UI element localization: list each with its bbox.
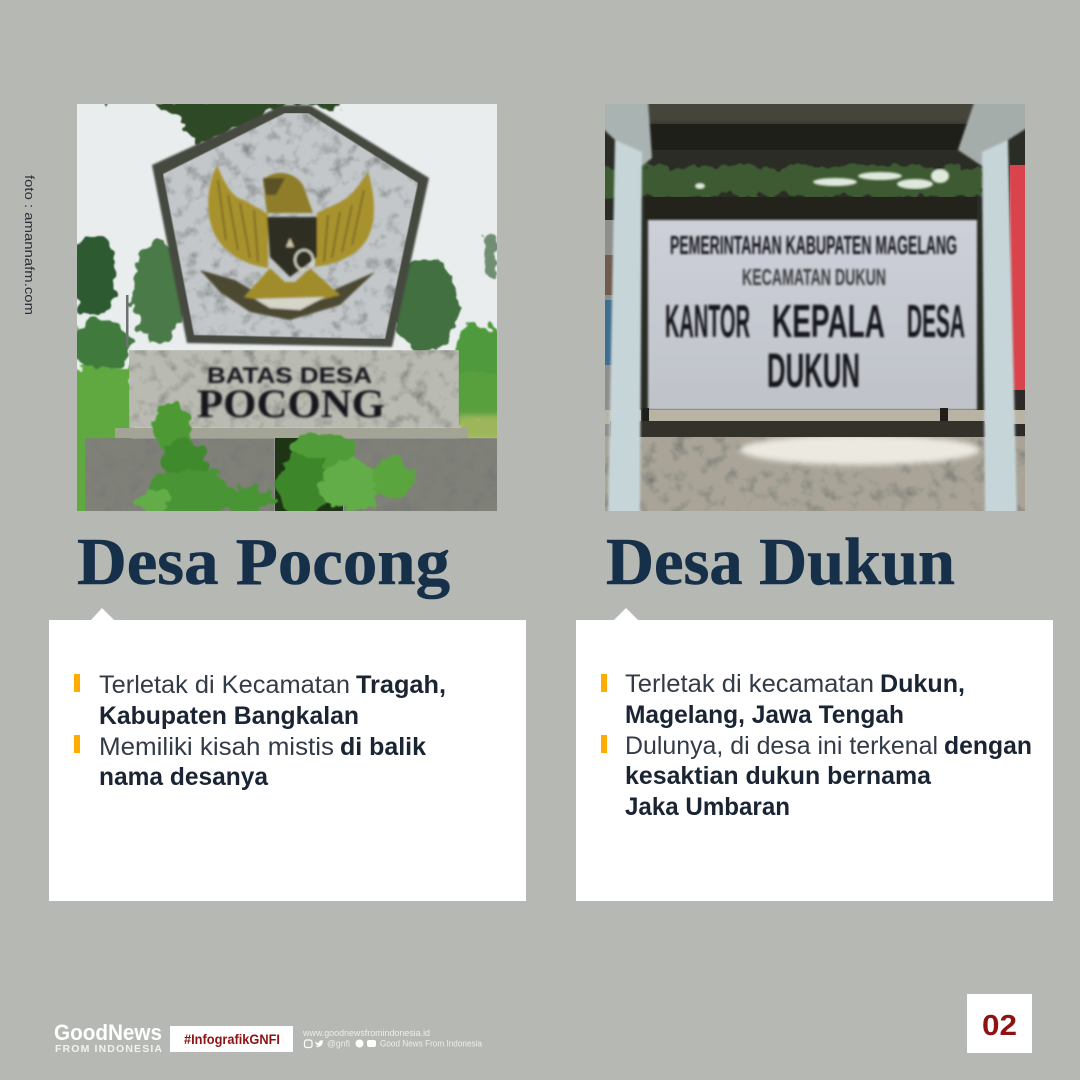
stone pentagon xyxy=(152,105,429,347)
photo: Batas Desa Pocong stone marker: BATAS DESA xyxy=(207,363,372,388)
bullet 2: di balik xyxy=(340,733,426,761)
icon: instagram xyxy=(304,1040,312,1048)
bullet 2: Memiliki kisah mistis xyxy=(99,733,334,761)
bullet 2: Dulunya, di desa ini terkenal xyxy=(625,732,938,760)
bullet 1 xyxy=(74,671,446,730)
bullet 2: nama desanya xyxy=(99,763,269,791)
eagle emblem xyxy=(200,165,375,320)
photo: Batas Desa Pocong stone marker: POCONG xyxy=(197,381,385,426)
photo: Kantor Kepala Desa Dukun sign: KECAMATAN DUKUN xyxy=(742,264,886,290)
page number xyxy=(967,994,1032,1053)
stone base with carved text xyxy=(129,350,459,428)
website and social handles: @gnfi xyxy=(327,1038,350,1048)
panel: Desa Dukun xyxy=(576,608,1053,901)
icon: facebook xyxy=(356,1040,364,1048)
ground xyxy=(605,410,1025,424)
bullet 1 xyxy=(601,670,965,729)
bullet 1: Magelang, Jawa Tengah xyxy=(625,701,904,729)
hashtag label: #InfografikGNFI xyxy=(184,1032,280,1047)
bullet 2: kesaktian dukun bernama xyxy=(625,762,932,790)
panel box xyxy=(576,620,1053,901)
heading: Desa Dukun: Desa Dukun xyxy=(606,525,955,599)
photo: Kantor Kepala Desa Dukun sign: KANTOR xyxy=(665,295,750,347)
bullet 1: Dukun, xyxy=(880,670,965,698)
lower beam xyxy=(610,421,985,437)
photo credit: foto : amannafm.com xyxy=(22,175,37,315)
website and social handles xyxy=(302,1028,482,1048)
bullet 1: Terletak di kecamatan xyxy=(625,670,874,698)
bullet 1: Terletak di Kecamatan xyxy=(99,671,350,699)
photo: Kantor Kepala Desa Dukun sign: DUKUN xyxy=(767,345,860,398)
icon: youtube xyxy=(367,1040,376,1047)
photo: Batas Desa Pocong stone marker xyxy=(60,100,506,518)
foliage xyxy=(136,404,413,516)
white posts xyxy=(600,100,1030,516)
panel pointer xyxy=(614,608,638,620)
photo: Kantor Kepala Desa Dukun sign: KEPALA xyxy=(772,295,885,347)
bullet 2: Jaka Umbaran xyxy=(625,793,790,821)
panel pointer xyxy=(91,608,114,620)
website and social handles: www.goodnewsfromindonesia.id xyxy=(302,1028,430,1038)
bullet 2 xyxy=(601,732,1032,821)
signboard xyxy=(648,220,977,410)
panel: Desa Pocong xyxy=(49,608,526,901)
bullet 1: Kabupaten Bangkalan xyxy=(99,702,359,730)
heading: Desa Pocong: Desa Pocong xyxy=(77,525,450,599)
GoodNews From Indonesia logo: GoodNews xyxy=(54,1020,162,1045)
GoodNews From Indonesia logo xyxy=(54,1020,162,1055)
bullet 2 xyxy=(74,733,426,791)
bullet 2: dengan xyxy=(944,732,1032,760)
photo: Kantor Kepala Desa Dukun sign xyxy=(595,98,1035,521)
website and social handles: Good News From Indonesia xyxy=(380,1038,482,1048)
photo: Kantor Kepala Desa Dukun sign: DESA xyxy=(907,295,965,347)
bullet 1: Tragah, xyxy=(356,671,446,699)
panel box xyxy=(49,620,526,901)
hashtag label xyxy=(170,1026,293,1052)
page number: 02 xyxy=(982,1010,1017,1042)
GoodNews From Indonesia logo: FROM INDONESIA xyxy=(55,1043,162,1055)
icon: twitter xyxy=(315,1040,324,1047)
